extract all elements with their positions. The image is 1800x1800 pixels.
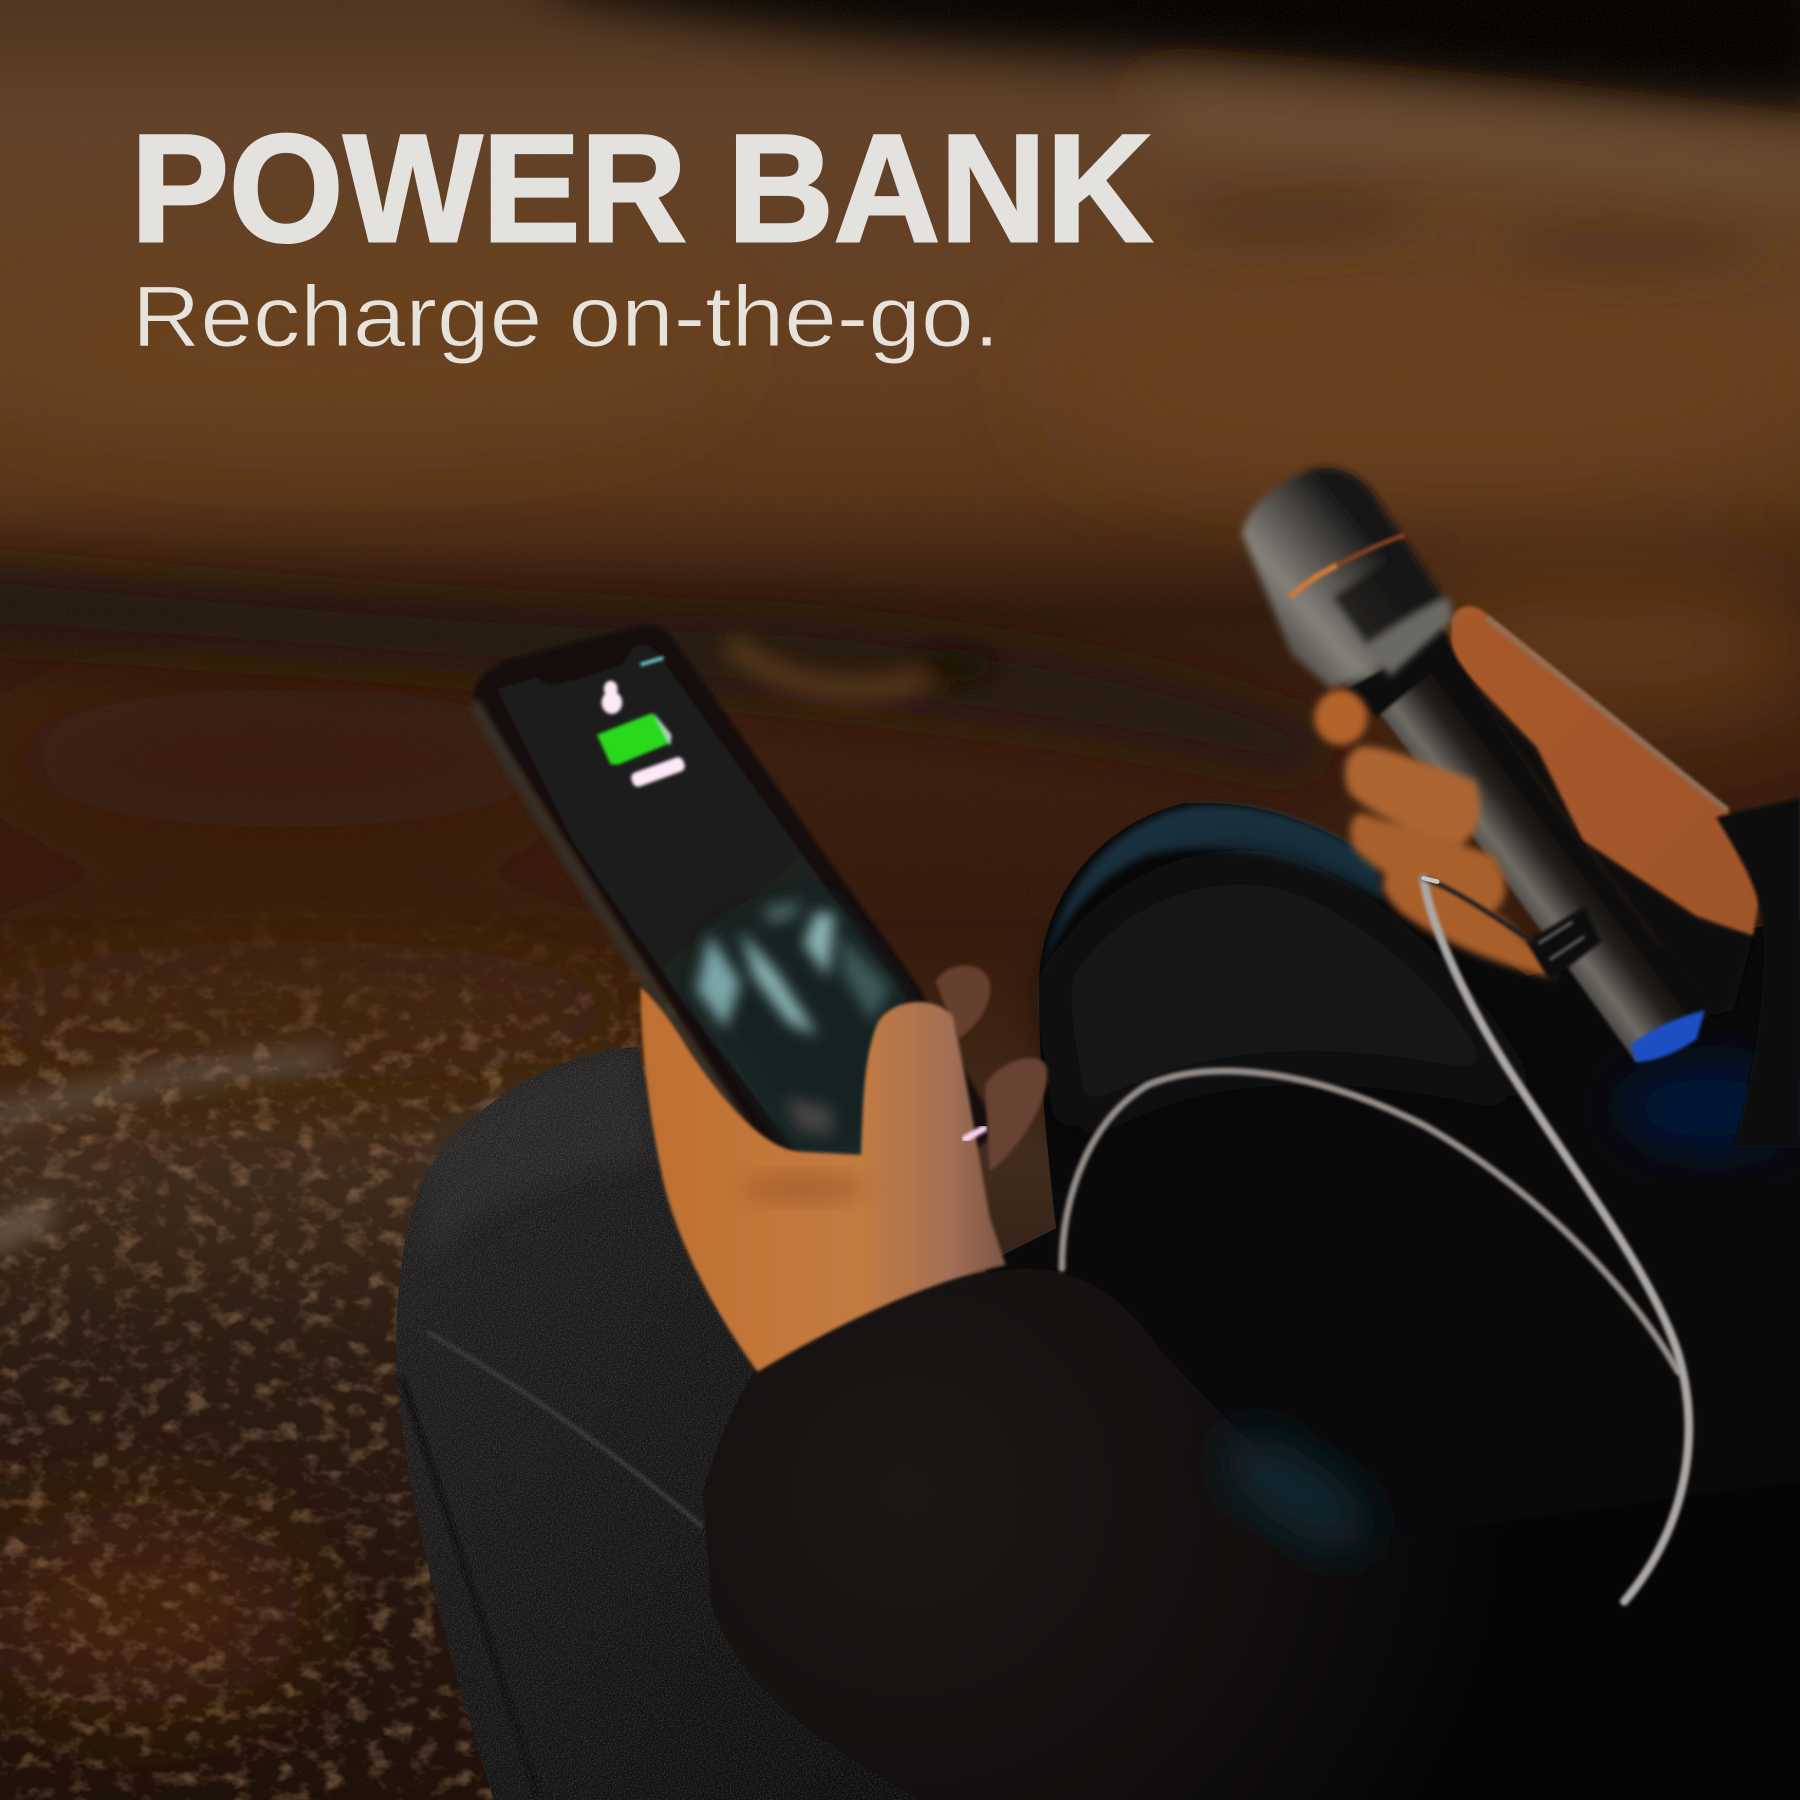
photo grain [0, 0, 1800, 918]
wallpaper mountain [695, 897, 906, 1154]
right-hand fingers [1314, 690, 1557, 978]
orange ring [1290, 565, 1337, 597]
title: POWER BANK [131, 103, 1153, 274]
right-hand thumb and palm [1451, 606, 1800, 1148]
flashlight clip and blue ring [1527, 907, 1705, 1062]
back fingers [936, 966, 990, 1039]
phone screen [497, 645, 905, 1157]
phone body [473, 625, 999, 1159]
phone button reflection [965, 1128, 984, 1139]
subtitle: Recharge on-the-go. [132, 269, 1000, 365]
flashlight head [1242, 468, 1452, 689]
speckled leaves [0, 895, 689, 1800]
charging cables [1062, 878, 1689, 1601]
left hand holding phone [641, 966, 1047, 1372]
right leg and torso [918, 803, 1800, 1800]
palm and thumb [641, 987, 1006, 1372]
dark jacket sleeve [703, 1268, 1800, 1800]
battery icon [597, 658, 686, 788]
blue inner sleeve glow [1619, 1062, 1800, 1154]
left leg [396, 1047, 918, 1800]
flashlight power bank [1242, 468, 1710, 1062]
flashlight barrel [1337, 626, 1710, 1062]
smartphone [473, 625, 999, 1159]
